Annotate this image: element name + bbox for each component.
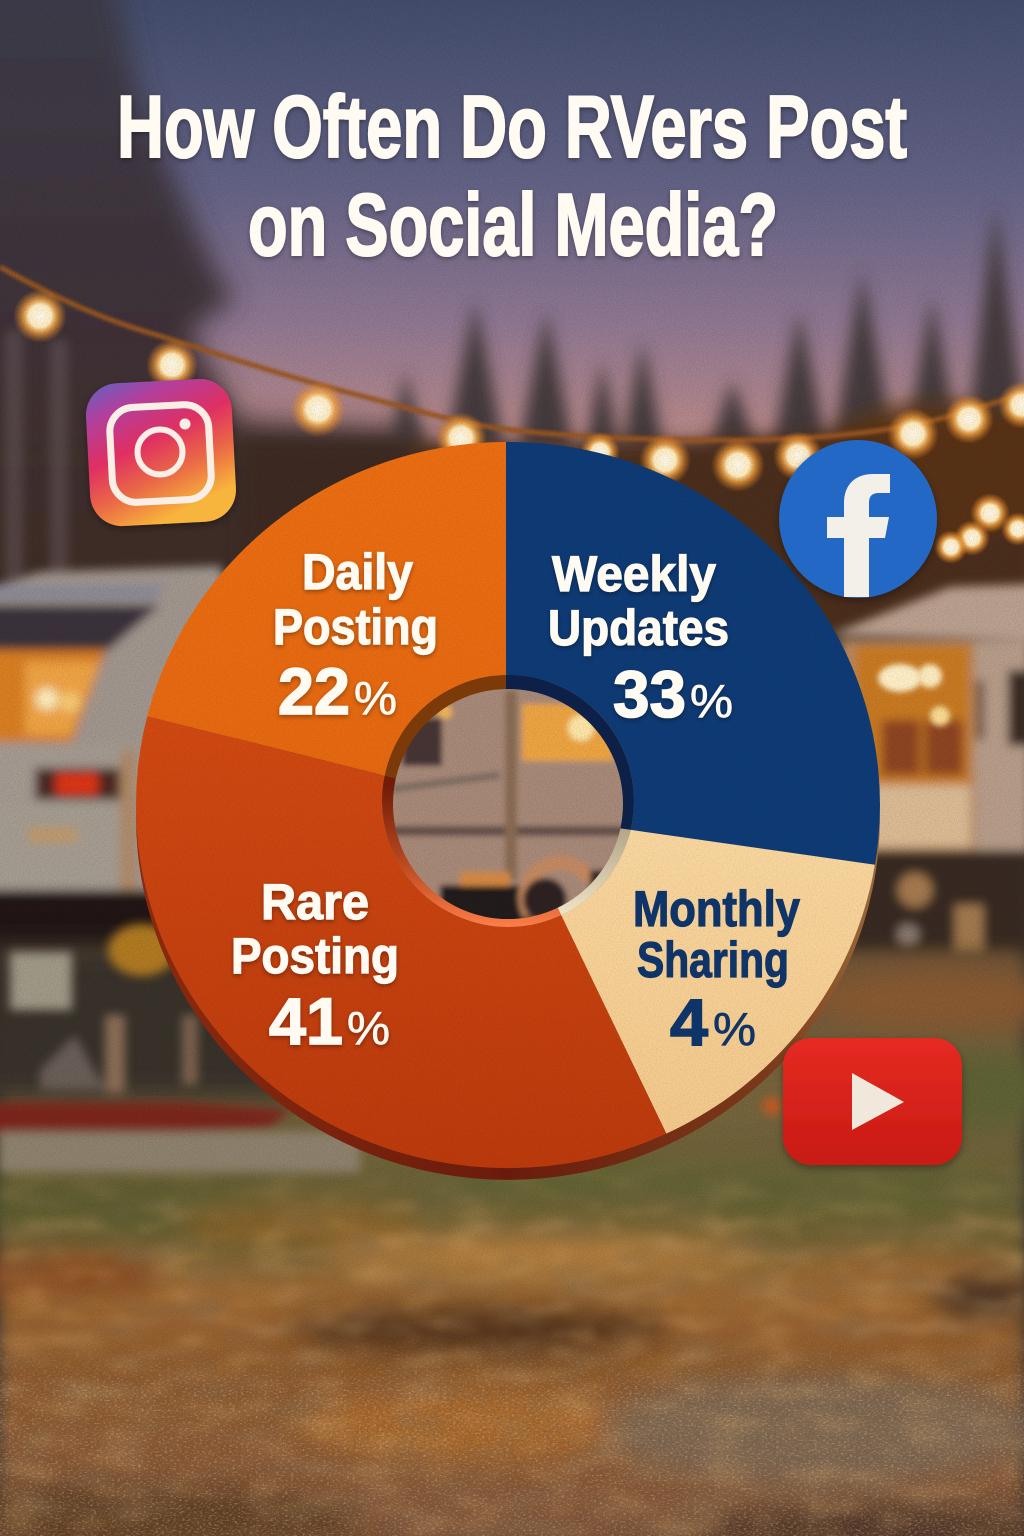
icon: facebook [779,440,937,598]
slice: rare posting 41% [136,716,666,1168]
label: weekly updates: 33 [613,657,686,731]
label: rare posting: % [347,1002,390,1054]
label: weekly updates: Updates [548,600,729,656]
label: rare posting: Rare [261,874,369,930]
background: mottled ground patches [0,1150,1024,1536]
slice: monthly sharing 4% [561,830,875,1134]
inner wall of donut hole [382,675,634,927]
background: camp objects and blanket [0,924,781,1172]
icon: youtube [783,1038,962,1165]
donut bottom edge [136,805,880,1180]
background: warm dark band under the lights [240,400,1024,640]
label: rare posting: Posting [231,928,399,984]
background: gravel texture [0,1330,1024,1536]
background: center RV seen through the donut hole [380,680,640,930]
background: right RV [830,584,1024,960]
label: weekly updates: Weekly [552,546,716,602]
label: weekly updates: % [690,675,733,727]
label: daily posting: Daily [302,544,413,600]
background: tall trees on the left [0,0,420,620]
slice: weekly updates 33% [506,442,880,865]
background: tree trunks on the left [5,330,68,580]
label: rare posting [231,874,399,1058]
label: monthly sharing [633,881,800,1059]
icon: instagram [84,377,238,528]
donut chart [86,404,962,1180]
donut surface texture [136,442,880,1168]
label: daily posting: 22 [278,654,350,728]
title: on Social Media? [248,175,778,274]
title [117,77,907,274]
label: monthly sharing: Monthly [633,881,800,937]
background: ground [0,924,1024,1536]
background: left RV [0,566,230,960]
background: string lights [0,267,1024,564]
background: distant tree line [390,205,1024,450]
label: weekly updates [548,546,733,731]
slice: daily posting 22% [147,442,506,776]
label: rare posting: 41 [269,984,343,1058]
label: monthly sharing: 4 [670,985,708,1059]
label: daily posting: Posting [273,599,438,655]
label: monthly sharing: Sharing [637,932,789,988]
background: bright lamps in right RV [878,664,950,726]
label: daily posting: % [354,672,397,724]
label: monthly sharing: % [713,1003,756,1055]
label: daily posting [273,544,438,728]
